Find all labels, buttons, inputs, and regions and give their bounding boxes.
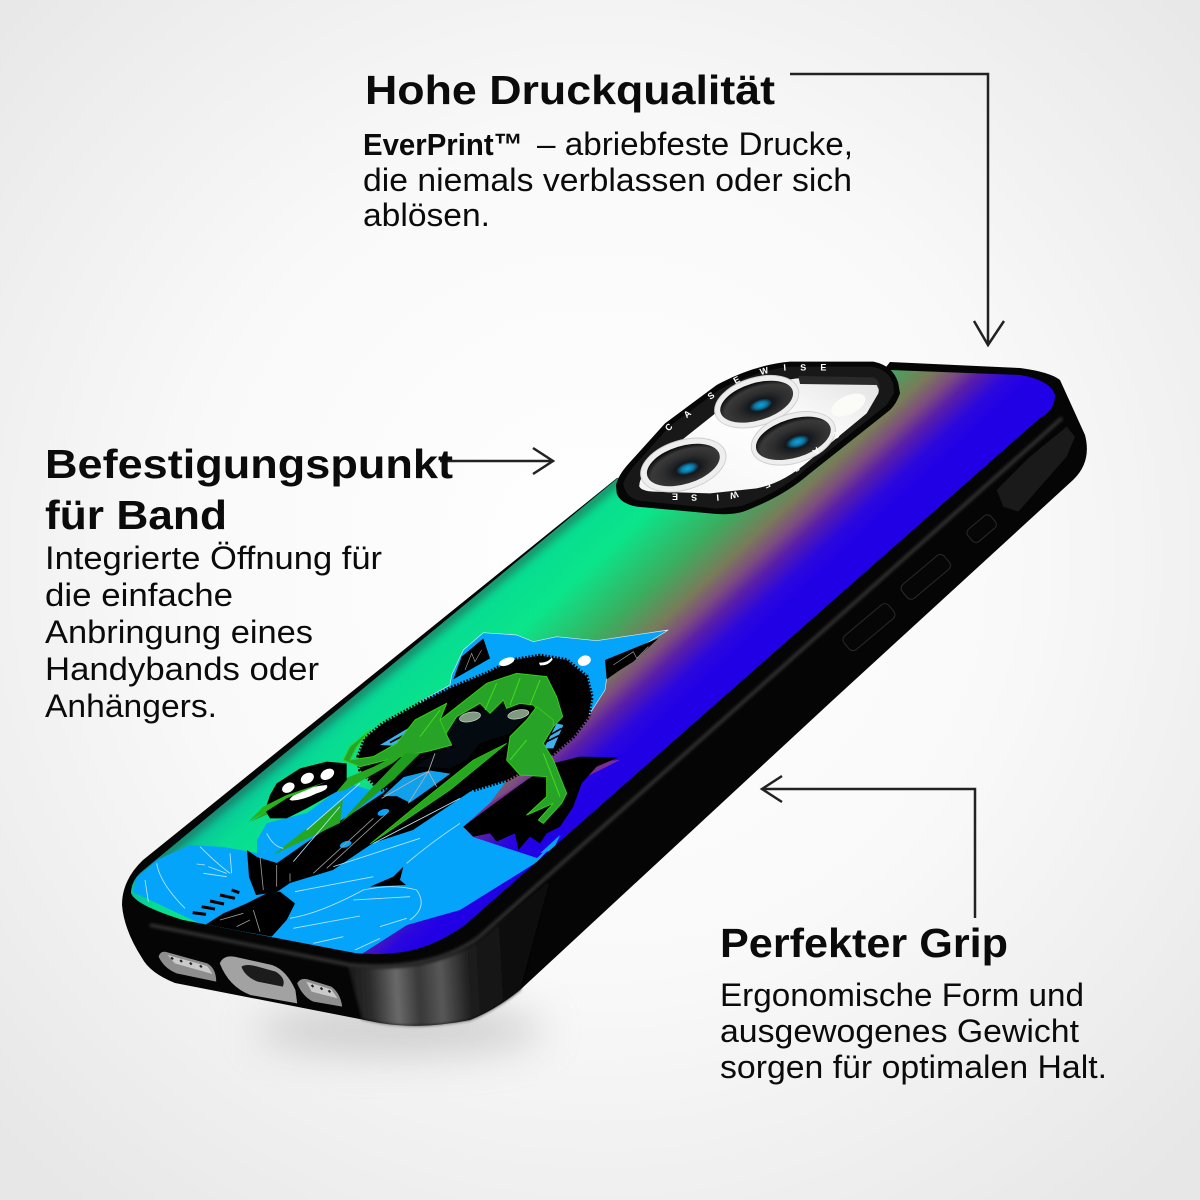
sleeve lines [145,783,460,950]
lens right [745,402,842,475]
side button: volume down [841,601,897,653]
body: strap attachment: Anhängers. [45,688,217,724]
body: print quality: ablösen. [363,197,490,233]
body: grip: sorgen für optimalen Halt. [720,1049,1107,1085]
hair left mass [343,703,452,767]
side details [841,427,1075,653]
paw pads [282,768,334,801]
window top shadow [798,376,880,391]
collar bow [382,770,452,803]
purple tail stripe [463,760,620,828]
long hair strand one [340,753,420,823]
heading: print quality: Hohe Druckqualität [365,67,775,113]
lens top [708,366,805,437]
buttons [339,807,390,849]
body: print quality: die niemals verblassen oder sich [363,162,852,198]
striped collar left [380,728,408,746]
camera bump [616,362,900,514]
hair bangs [440,673,563,735]
heading: grip: Perfekter Grip [720,920,1008,966]
rim highlight [150,418,1062,966]
flash [828,389,869,421]
neck shadow [415,743,480,768]
black outfit [247,781,473,895]
bottom corner sheen [348,880,550,1026]
eyes [459,709,530,722]
brand text top: CASEWISE [663,362,826,433]
side button: mute [965,513,998,544]
text block: strap attachment [45,441,453,724]
lens left [634,429,733,501]
stripe dashes [390,728,562,744]
body: print quality: EverPrint™ [363,127,523,162]
printed back panel [131,370,1055,954]
body: grip: Ergonomische Form und [720,977,1084,1013]
left speaker grille [159,952,216,982]
green strand tip [248,782,327,822]
extended hair strands [250,756,402,855]
brand text bottom: CASEWISE [672,429,842,503]
paw mitten [265,762,347,818]
body: strap attachment: Integrierte Öffnung für [45,540,382,576]
arrow: strap attachment [440,448,553,474]
hood dots [499,655,591,666]
face [445,700,527,748]
body: strap attachment [45,540,382,724]
top right side sheen [997,427,1075,512]
black tail [463,757,618,850]
right cat ear [605,638,658,679]
text block: print quality [363,67,853,233]
charging port [220,956,297,1003]
arrow: grip [762,776,975,918]
text block: grip [720,920,1107,1085]
outfit lines [220,813,387,932]
lower body, bottom zoom coordinates [145,762,460,950]
side button: volume up [899,552,953,601]
phone shadow [255,1004,545,1056]
bottom ports [159,952,342,1007]
phone case [122,362,1087,1026]
long hair strand two [370,743,507,844]
black triangle fold [370,867,406,887]
artwork: hooded character [133,478,668,957]
striped cuff [193,890,239,914]
heading: strap attachment: für Band [45,492,227,538]
hair right lobe [507,707,567,823]
body: grip: ausgewogenes Gewicht [720,1013,1079,1049]
striped collar right [544,723,563,748]
blue hood [418,630,668,720]
panel edge shade [135,478,620,878]
hair highlight strands [420,678,560,797]
tail bits [540,835,560,853]
body: grip [720,977,1107,1085]
left cat ear [453,638,490,679]
lower mitten [205,892,295,937]
arrow: top callout to phone [790,74,1004,345]
body: print quality [363,126,853,233]
fur lining [358,656,592,790]
body: strap attachment: Anbringung eines [45,614,313,650]
frame top face [623,367,894,509]
heading: strap attachment [45,441,453,538]
bow lines [382,753,437,803]
case body [122,362,1087,1026]
body: strap attachment: die einfache [45,577,233,613]
ear hairlines [465,647,648,670]
body: print quality: – abriebfeste Drucke, [537,126,853,162]
bump frame [616,362,900,514]
right speaker grille [297,979,342,1007]
heading: strap attachment: Befestigungspunkt [45,441,453,487]
body: strap attachment: Handybands oder [45,651,319,687]
hood and body, top zoom coordinates [340,630,668,853]
bump window [639,378,879,493]
blue body and sleeves [133,780,562,954]
